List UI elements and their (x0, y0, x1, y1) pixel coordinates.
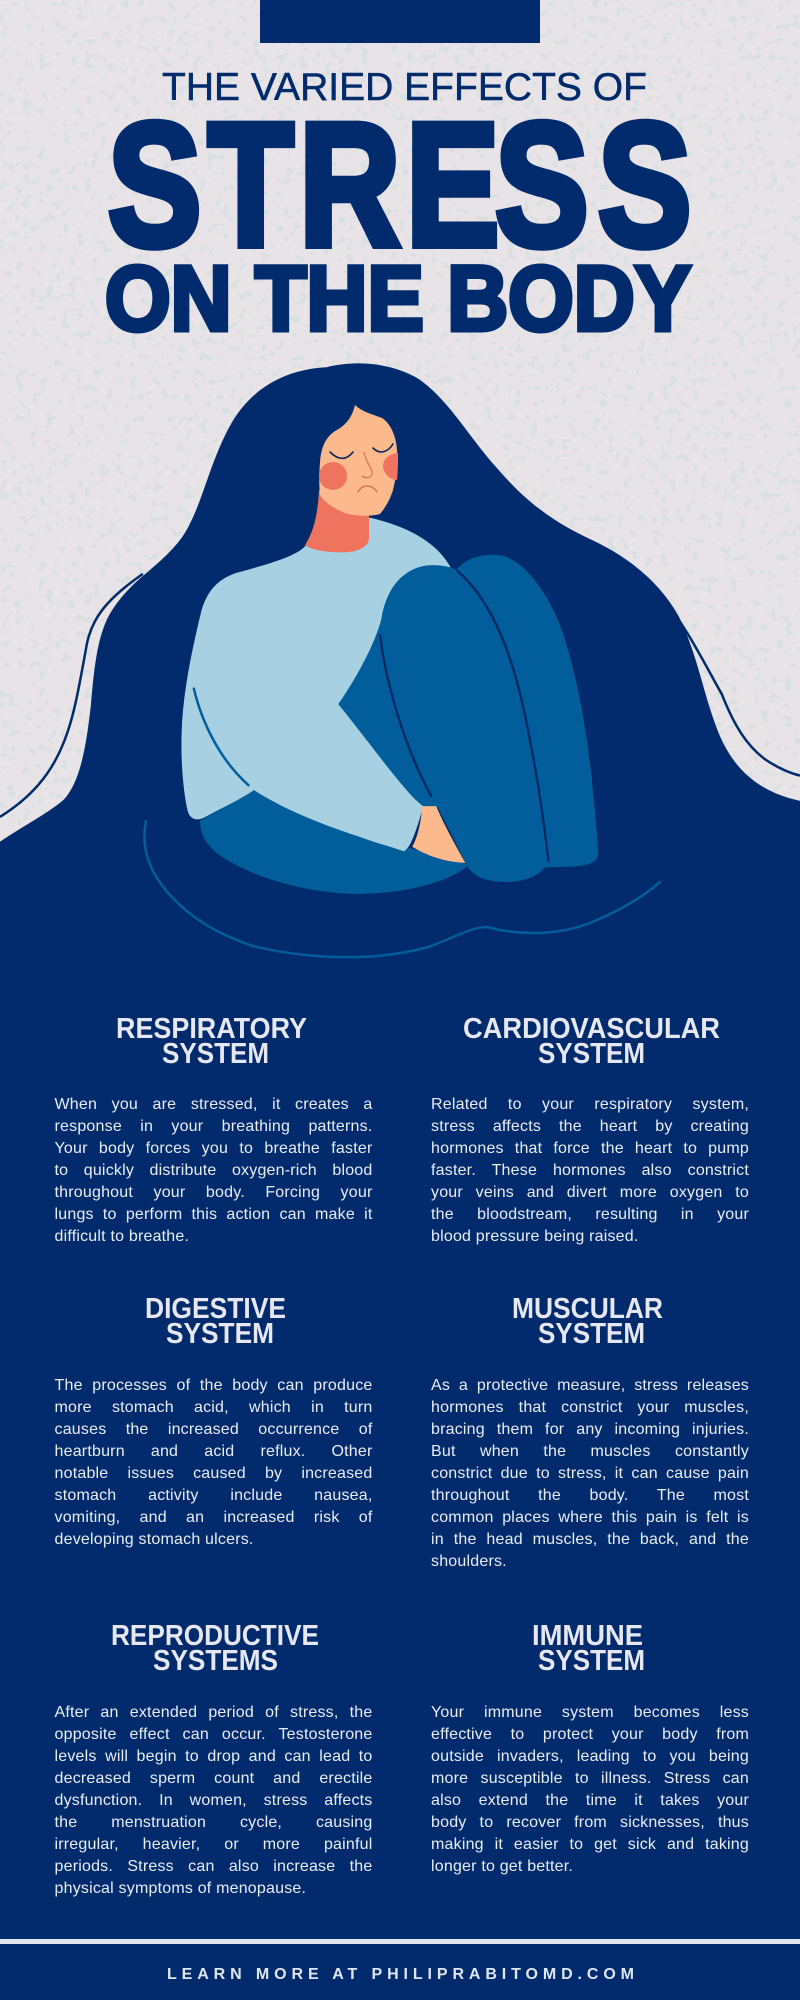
text: immune system: effective to protect your body from (431, 1726, 749, 1742)
section headings: CARDIOVASCULAR (463, 1013, 720, 1045)
text: reproductive systems: After an extended period of stress, the (54, 1704, 372, 1720)
section headings: SYSTEM (162, 1038, 269, 1070)
text: respiratory system: Your body forces you to breathe faster (54, 1140, 372, 1157)
text: respiratory system (54, 1096, 372, 1245)
text: immune system: body to recover from sicknesses, thus (431, 1814, 749, 1830)
text: reproductive systems: irregular, heavier, or more painful (54, 1836, 372, 1852)
pants: front leg (338, 565, 548, 882)
text: respiratory system: When you are stressed, it creates a (54, 1096, 372, 1113)
top tab (260, 0, 540, 43)
text: digestive system: developing stomach ulcers. (54, 1530, 254, 1548)
text: reproductive systems (54, 1704, 372, 1896)
text: cardiovascular system: Related to your respiratory system, (431, 1096, 749, 1113)
section headings: SYSTEM (166, 1318, 274, 1350)
text: muscular system: common places where this pain is felt is (431, 1508, 749, 1526)
hand (412, 806, 465, 863)
pants: back leg (457, 555, 598, 867)
footer divider (0, 1939, 800, 1944)
text: respiratory system: lungs to perform this action can make it (54, 1206, 372, 1223)
text: cardiovascular system (431, 1096, 749, 1245)
text: cardiovascular system: faster. These hormones also constrict (431, 1162, 749, 1179)
text: muscular system: As a protective measure, stress releases (431, 1376, 749, 1394)
text: respiratory system: to quickly distribute oxygen-rich blood (54, 1162, 372, 1179)
text: cardiovascular system: hormones that force the heart to pump (431, 1140, 749, 1157)
text: respiratory system: response in your breathing patterns. (54, 1118, 372, 1135)
section headings: DIGESTIVE (145, 1293, 286, 1325)
section headings: IMMUNE (532, 1620, 643, 1652)
text: muscular system: shoulders. (431, 1552, 507, 1570)
text: reproductive systems: the menstruation cycle, causing (54, 1814, 372, 1830)
title: THE VARIED EFFECTS OF (162, 66, 647, 109)
text: digestive system: notable issues caused by increased (54, 1464, 372, 1482)
text: muscular system: throughout the body. The most (431, 1486, 749, 1504)
navy hair and lower panel (0, 363, 800, 962)
face (319, 405, 397, 516)
clothing fold lines (194, 571, 548, 861)
section headings: MUSCULAR (512, 1293, 663, 1325)
text: digestive system: stomach activity include nausea, (54, 1486, 372, 1504)
text: immune system: outside invaders, leading to you being (431, 1748, 749, 1764)
text: cardiovascular system: blood pressure being raised. (431, 1228, 639, 1245)
text: digestive system: more stomach acid, which in turn (54, 1398, 372, 1416)
text: muscular system: in the head muscles, the back, and the (431, 1530, 749, 1548)
text: muscular system: hormones that constrict your muscles, (431, 1398, 749, 1416)
text: digestive system: causes the increased occurrence of (54, 1420, 372, 1438)
text: reproductive systems: opposite effect can occur. Testosterone (54, 1726, 372, 1742)
facial features (330, 444, 393, 492)
text: muscular system: constrict due to stress, it can cause pain (431, 1464, 749, 1482)
neck (305, 490, 369, 552)
text: muscular system: bracing them for any incoming injuries. (431, 1420, 749, 1438)
text: muscular system (431, 1376, 749, 1570)
text: digestive system: The processes of the body can produce (54, 1376, 372, 1394)
pants: seat (200, 790, 469, 894)
sweater (181, 518, 451, 851)
text: reproductive systems: periods. Stress can also increase the (54, 1858, 372, 1874)
text: digestive system: heartburn and acid reflux. Other (54, 1442, 372, 1460)
text: immune system (431, 1704, 749, 1874)
cheeks (319, 453, 398, 490)
illustration: stressed woman with long hair (0, 363, 800, 962)
section headings: REPRODUCTIVE (111, 1620, 319, 1652)
section headings (111, 1013, 720, 1677)
section headings: SYSTEM (538, 1318, 645, 1350)
title (105, 66, 691, 350)
section headings: RESPIRATORY (116, 1013, 307, 1045)
text: immune system: more susceptible to illness. Stress can (431, 1770, 749, 1786)
text: reproductive systems: physical symptoms of menopause. (54, 1880, 306, 1896)
title: STRESS (108, 87, 691, 283)
navy lower panel (0, 945, 800, 2000)
title: ON THE BODY (105, 248, 691, 350)
text: immune system: making it easier to get sick and taking (431, 1836, 749, 1852)
text: reproductive systems: decreased sperm count and erectile (54, 1770, 372, 1786)
text: reproductive systems: dysfunction. In women, stress affects (54, 1792, 372, 1808)
footer call to action: LEARN MORE AT PHILIPRABITOMD.COM (167, 1966, 634, 1983)
text: immune system: Your immune system becomes less (431, 1704, 749, 1720)
hair strands (0, 574, 800, 817)
water ripple (144, 821, 660, 957)
section headings: SYSTEM (538, 1645, 645, 1677)
text: respiratory system: difficult to breathe. (54, 1228, 189, 1245)
text: digestive system (54, 1376, 372, 1548)
text: cardiovascular system: your veins and divert more oxygen to (431, 1184, 749, 1201)
text: cardiovascular system: stress affects the heart by creating (431, 1118, 749, 1135)
text: muscular system: But when the muscles constantly (431, 1442, 749, 1460)
text: respiratory system: throughout your body. Forcing your (54, 1184, 372, 1201)
section headings: SYSTEMS (153, 1645, 278, 1677)
text: digestive system: vomiting, and an increased risk of (54, 1508, 372, 1526)
text: cardiovascular system: the bloodstream, resulting in your (431, 1206, 749, 1223)
text: reproductive systems: levels will begin to drop and can lead to (54, 1748, 372, 1764)
text: immune system: longer to get better. (431, 1858, 573, 1874)
text: immune system: also extend the time it takes your (431, 1792, 749, 1808)
section headings: SYSTEM (538, 1038, 645, 1070)
